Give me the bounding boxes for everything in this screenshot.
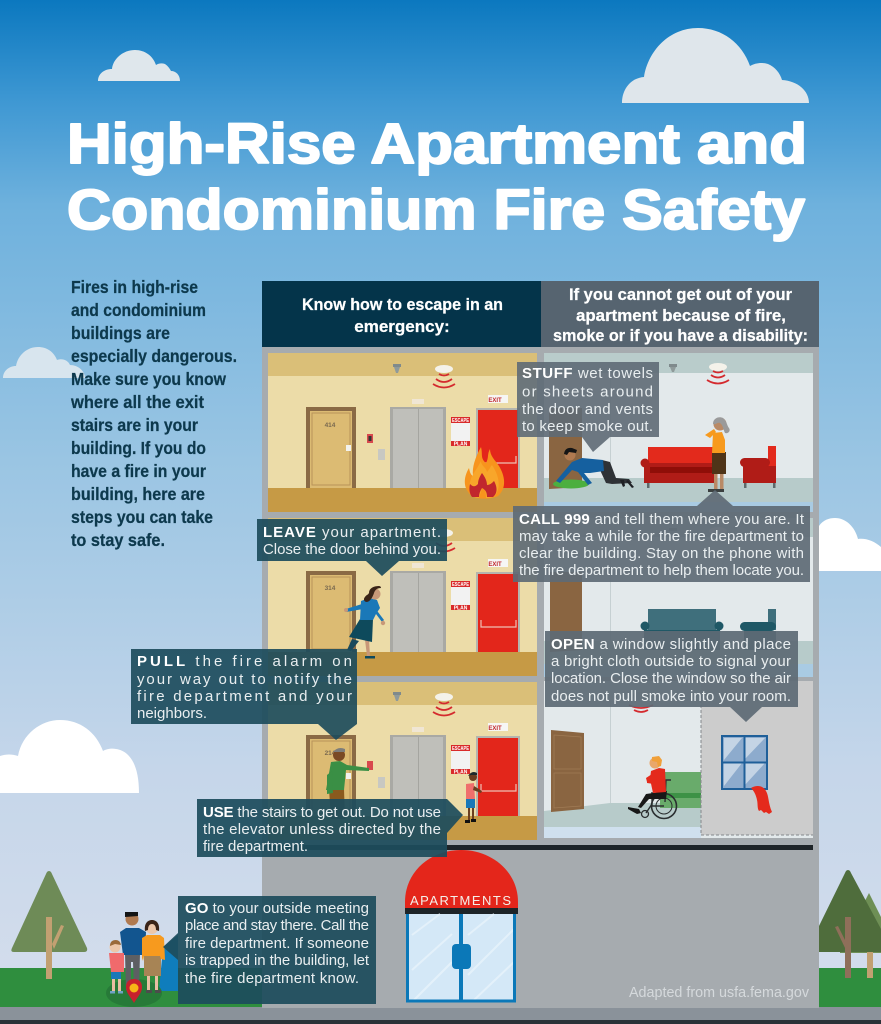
callout: open: a bright cloth outside to signal your xyxy=(551,653,791,670)
intro text: Make sure you know xyxy=(71,369,226,389)
callout: stuff xyxy=(517,362,659,452)
header: right column: If you cannot get out of your xyxy=(569,285,792,304)
hallway floor 2: PLAN xyxy=(454,770,468,776)
callout: stuff: STUFF wet towels xyxy=(522,365,653,382)
header: right column: smoke or if you have a disability: xyxy=(553,326,808,345)
furniture: teal armchair xyxy=(740,609,776,650)
callout: use: fire department. xyxy=(203,838,308,855)
person: child at stairs xyxy=(465,772,482,823)
callout: open: does not pull smoke into your room. xyxy=(551,688,791,705)
intro text xyxy=(70,277,237,550)
storefront: awning and doors: APARTMENTS xyxy=(410,893,511,908)
person: man pulling alarm xyxy=(326,748,369,819)
cloud: right xyxy=(819,518,881,571)
callout: go xyxy=(163,896,376,1004)
hallway floor 3 xyxy=(268,518,537,676)
callout: pull: your way out to notify the xyxy=(137,671,352,688)
title xyxy=(67,112,807,242)
source credit: Adapted from usfa.fema.gov xyxy=(629,985,810,1001)
apartment room 4 xyxy=(544,353,813,512)
callout: use: the elevator unless directed by the xyxy=(203,821,441,838)
furniture: green sofa xyxy=(660,772,701,808)
person: man crawling with towel xyxy=(553,448,634,488)
road xyxy=(0,1007,881,1024)
icon: map pin xyxy=(126,979,142,1003)
cloud: lower left xyxy=(0,720,139,793)
icon: red cloth signal xyxy=(751,786,772,814)
callout: call 999: may take a while for the fire department to xyxy=(519,528,804,545)
callout: use: USE the stairs to get out. Do not use xyxy=(203,804,441,821)
callout: go: GO to your outside meeting xyxy=(185,900,369,917)
callout: call 999: the fire department to help them locate you. xyxy=(519,562,804,579)
callout: pull: neighbors. xyxy=(137,705,207,722)
icon: blue arrow behind family xyxy=(159,935,178,991)
furniture: red sofa xyxy=(640,447,718,488)
hallway floor 2: EXIT xyxy=(488,726,502,732)
header: left column xyxy=(262,281,541,347)
hallway floor 3: ESCAPE xyxy=(452,582,470,588)
hallway floor 3: EXIT xyxy=(488,562,502,568)
header: left column: Know how to escape in an xyxy=(302,295,503,314)
intro text: steps you can take xyxy=(71,507,213,527)
callout: pull: fire department and your xyxy=(137,688,352,705)
intro text: have a fire in your xyxy=(71,461,206,481)
furniture: teal sofa xyxy=(640,609,724,650)
callout: stuff: to keep smoke out. xyxy=(522,418,653,435)
intro text: building. If you do xyxy=(71,438,206,458)
callout: open xyxy=(545,631,798,722)
callout: leave xyxy=(257,519,447,576)
intro text: and condominium xyxy=(71,300,206,320)
ground: grass right xyxy=(819,968,881,1007)
hallway floor 4: ESCAPE xyxy=(452,418,470,424)
callout: call 999: CALL 999 and tell them where you are. It xyxy=(519,511,805,528)
callout: pull xyxy=(131,649,357,740)
callout: use xyxy=(197,799,463,857)
icon: fire xyxy=(465,447,504,499)
callout: open: location. Close the window so the air xyxy=(551,670,791,687)
building xyxy=(262,347,819,1008)
tree: left xyxy=(11,871,87,979)
callout: go: is trapped in the building, let xyxy=(185,952,370,969)
tree: right front xyxy=(819,870,881,978)
hallway floor 4 xyxy=(268,353,537,512)
hallway floor 3: PLAN xyxy=(454,606,468,612)
callout: leave: LEAVE your apartment. xyxy=(263,524,441,541)
callout: go: fire department. If someone xyxy=(185,935,369,952)
header: right column xyxy=(541,281,819,347)
callout: call 999: clear the building. Stay on the phone with xyxy=(519,545,804,562)
title: High-Rise Apartment and xyxy=(67,112,807,176)
person: woman on phone xyxy=(705,417,730,492)
hallway floor 3: 314 xyxy=(325,585,336,592)
person: woman leaving xyxy=(344,586,385,658)
callout: go: place and stay there. Call the xyxy=(185,917,369,934)
intro text: stairs are in your xyxy=(71,415,198,435)
intro text: especially dangerous. xyxy=(71,346,237,366)
callout: call 999 xyxy=(513,490,810,582)
cloud: top right xyxy=(622,28,809,103)
header: right column: apartment because of fire, xyxy=(576,306,786,325)
callout: leave: Close the door behind you. xyxy=(263,541,441,558)
callout: stuff: the door and vents xyxy=(522,401,653,418)
family at meeting place xyxy=(106,912,165,1007)
intro text: where all the exit xyxy=(70,392,204,412)
callout: open: OPEN a window slightly and place xyxy=(551,636,791,653)
header: left column: emergency: xyxy=(354,317,450,336)
cloud: top left xyxy=(98,50,180,81)
intro text: Fires in high-rise xyxy=(71,277,198,297)
apartment room 3 xyxy=(544,518,813,677)
ground: grass left xyxy=(0,968,262,1007)
furniture: red armchair xyxy=(740,446,776,488)
hallway floor 4: EXIT xyxy=(488,398,502,404)
callout: go: the fire department know. xyxy=(185,970,359,987)
storefront: awning and doors xyxy=(405,850,518,1002)
intro text: to stay safe. xyxy=(71,530,165,550)
tree: right back xyxy=(840,893,881,978)
apartment room 2 xyxy=(544,681,813,838)
callout: pull: PULL the fire alarm on xyxy=(137,653,352,670)
person: wheelchair user on phone xyxy=(628,756,676,818)
ceiling beam xyxy=(262,845,813,850)
intro text: building, here are xyxy=(71,484,205,504)
hallway floor 2 xyxy=(268,682,537,840)
intro text: buildings are xyxy=(71,323,170,343)
hallway floor 2: ESCAPE xyxy=(452,746,470,752)
cloud: mid left xyxy=(3,347,85,378)
outer wall with window xyxy=(701,681,813,835)
callout: stuff: or sheets around xyxy=(522,384,653,400)
hallway floor 4: 414 xyxy=(325,422,336,429)
hallway floor 2: 214 xyxy=(325,750,336,757)
title: Condominium Fire Safety xyxy=(67,178,805,242)
hallway floor 4: PLAN xyxy=(454,442,468,448)
